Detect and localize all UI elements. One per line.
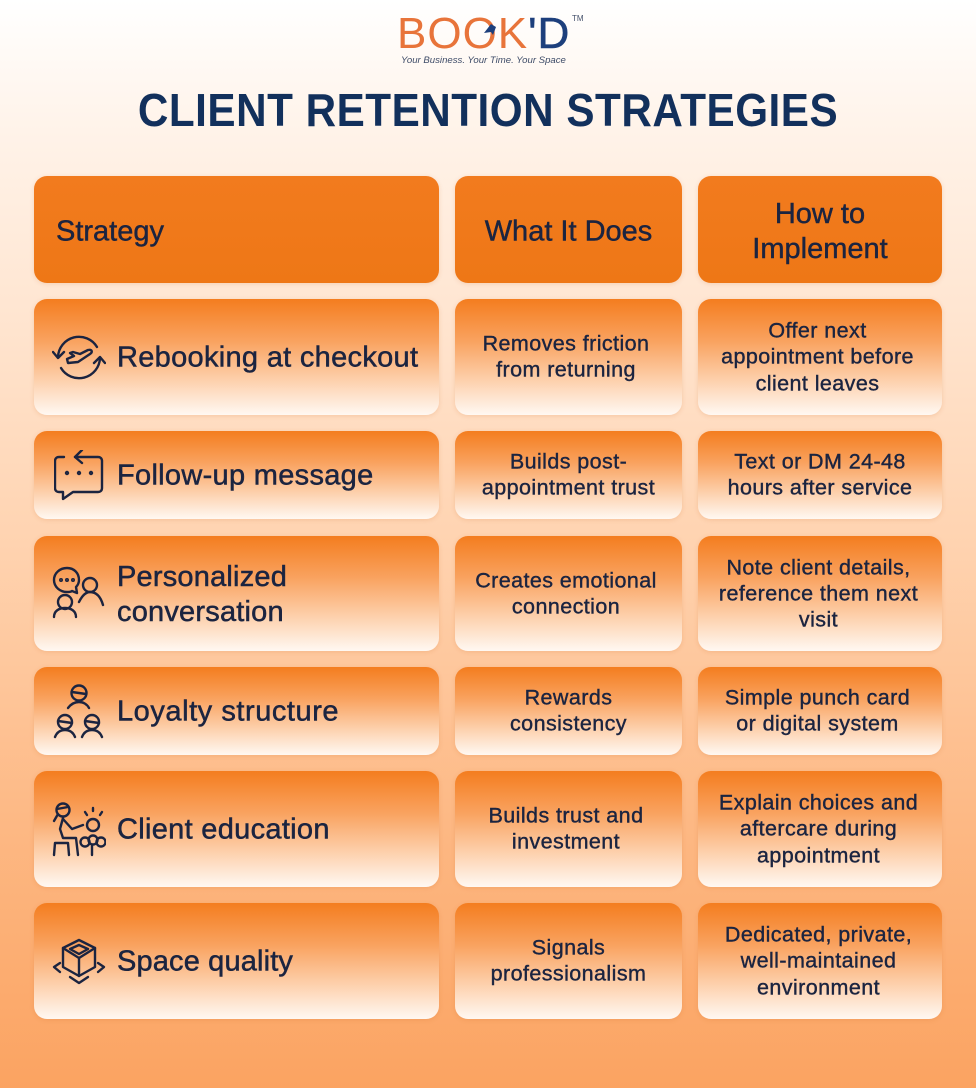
trademark: TM [572,14,584,23]
row 3 how to implement: visit [799,608,838,632]
table header: what it does [455,176,682,283]
icon: logo bookmark [484,24,496,35]
icon: people in conversation [52,566,104,618]
icon: three people [54,684,104,738]
row 1 what it does: from returning [496,358,636,382]
row 6 strategy: space quality: Space quality [117,946,293,978]
icon: box in space [52,938,106,984]
row 4 how to implement: Simple punch card [725,686,910,710]
row 3 strategy: personalized conversation [34,536,439,651]
row 4 how to implement: or digital system [736,712,899,736]
row 3 how to implement: reference them next [719,581,918,605]
row 4 what it does: consistency [510,712,627,736]
row 3 how to implement: Note client details, [726,555,911,579]
row 5 how to implement [698,771,942,887]
row 1 how to implement: appointment before [721,345,914,369]
logo wordmark: BOOK'D [397,9,570,58]
row 6 how to implement [698,903,942,1019]
row 3 how to implement [698,536,942,651]
row 5 how to implement: Explain choices and [719,791,918,815]
row 2 how to implement: Text or DM 24-48 [734,450,906,474]
row 3 strategy: personalized conversation: conversation [117,596,284,628]
icon: chat bubble with arrow [54,450,104,500]
icon: stylist with client [52,802,106,856]
table header: strategy [34,176,439,283]
row 6 how to implement: environment [757,975,880,999]
row 5 how to implement: aftercare during [740,817,897,841]
row 4 how to implement [698,667,942,755]
row 4 what it does: Rewards [525,686,612,710]
row 6 strategy: space quality [34,903,439,1019]
row 2 what it does: Builds post- [510,450,627,474]
row 2 what it does [455,431,682,519]
row 6 how to implement: well-maintained [741,949,896,973]
row 2 how to implement: hours after service [728,476,912,500]
icon: rebooking arrows and plane [52,336,106,380]
row 1 strategy: rebooking at checkout: Rebooking at checkout [117,342,418,374]
row 1 how to implement: client leaves [756,371,879,395]
row 3 strategy: personalized conversation: Personalized [117,560,287,592]
table header: how to implement: Implement [752,232,888,264]
table header: how to implement: How to [775,198,865,230]
row 1 what it does: Removes friction [483,332,649,356]
row 2 what it does: appointment trust [482,476,655,500]
row 5 what it does [455,771,682,887]
row 3 what it does [455,536,682,651]
logo tagline: Your Business. Your Time. Your Space [401,55,566,66]
row 1 how to implement: Offer next [768,319,867,343]
row 3 what it does: connection [512,594,620,618]
row 5 what it does: Builds trust and [489,804,643,828]
row 1 strategy: rebooking at checkout [34,299,439,415]
table header: what it does: What It Does [485,215,652,247]
table header: strategy: Strategy [56,215,164,247]
row 4 strategy: loyalty structure [34,667,439,755]
row 4 strategy: loyalty structure: Loyalty structure [117,696,339,728]
row 1 how to implement [698,299,942,415]
row 5 strategy: client education: Client education [117,814,330,846]
row 5 how to implement: appointment [757,843,880,867]
table header: how to implement [698,176,942,283]
row 2 how to implement [698,431,942,519]
title: CLIENT RETENTION STRATEGIES [138,84,838,136]
row 3 what it does: Creates emotional [475,568,657,592]
row 1 what it does [455,299,682,415]
row 5 strategy: client education [34,771,439,887]
row 6 what it does [455,903,682,1019]
row 6 how to implement: Dedicated, private, [725,923,912,947]
row 2 strategy: follow-up message [34,431,439,519]
logo [397,9,584,66]
row 2 strategy: follow-up message: Follow-up message [117,460,374,492]
row 5 what it does: investment [512,830,620,854]
row 6 what it does: Signals [532,936,605,960]
row 6 what it does: professionalism [491,962,646,986]
row 4 what it does [455,667,682,755]
